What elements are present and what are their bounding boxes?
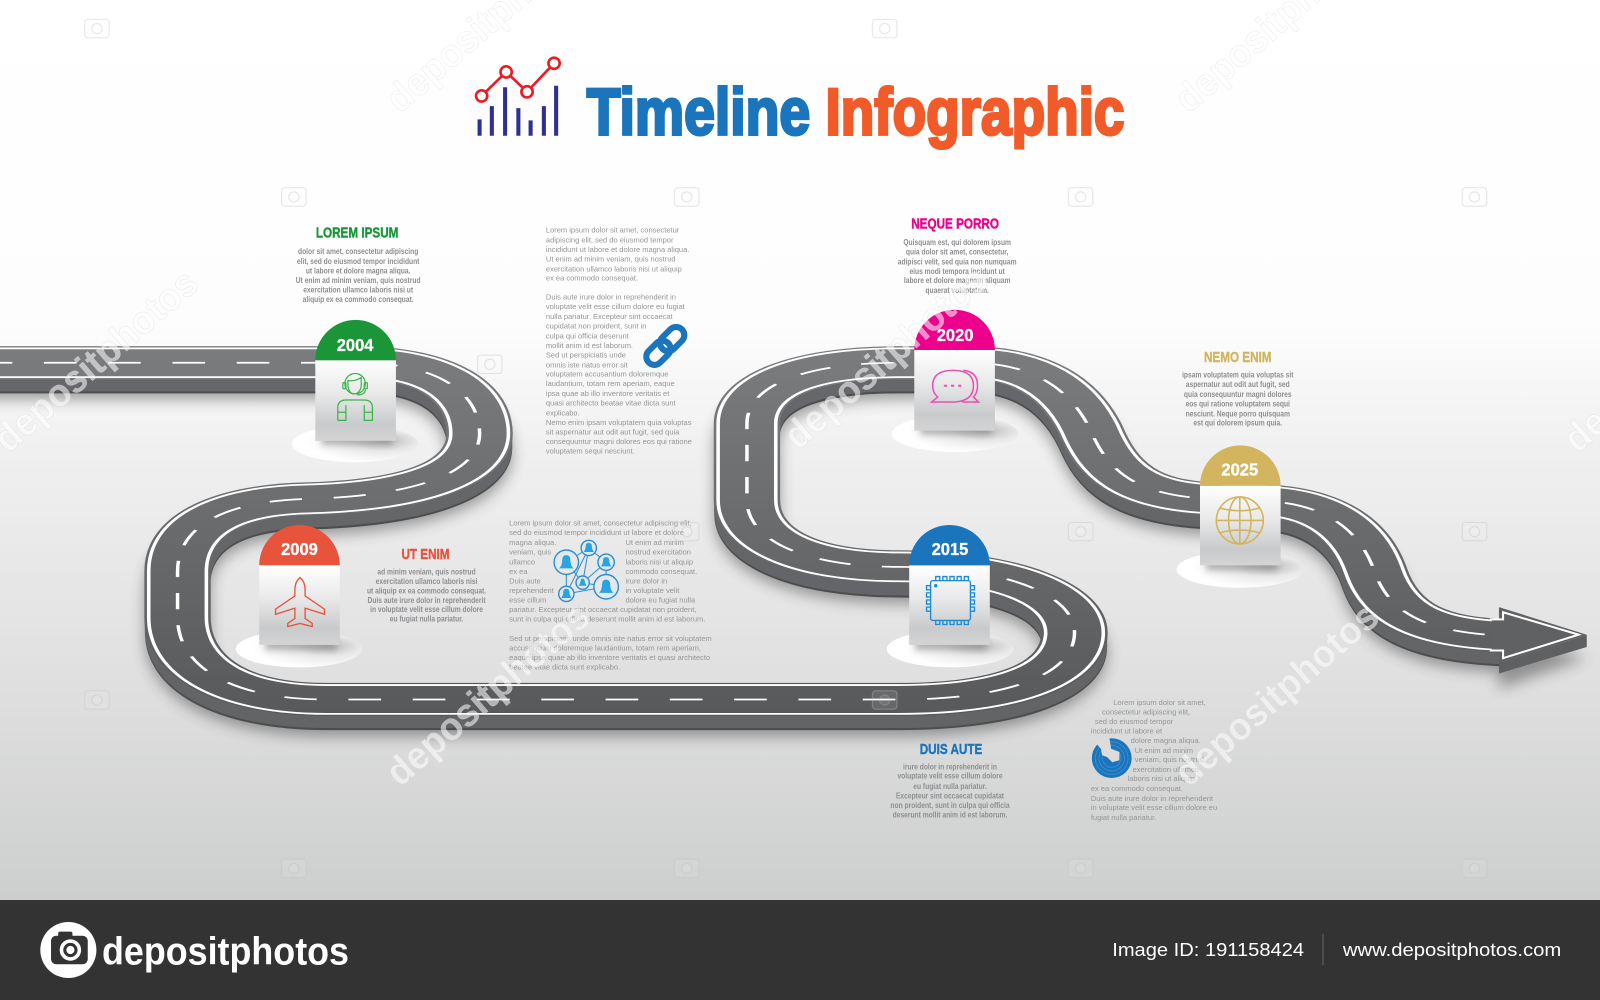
paragraph block with link icon: omnis iste natus error sit [546,360,629,369]
paragraph block with radial icon: consectetur adipiscing elit, [1102,707,1190,716]
footer url: www.depositphotos.com [1342,939,1561,960]
paragraph block with link icon: exercitation ullamco laboris nisi ut aliquip [546,264,682,273]
paragraph block with radial icon: Lorem ipsum dolor sit amet, [1113,698,1206,707]
paragraph block with link icon: Duis aute irure dolor in reprehenderit in [546,292,676,301]
text block: Ut Enim: in voluptate velit esse cillum dolore [370,605,483,614]
paragraph block with network icon: ex ea [509,567,528,576]
text block: Duis Aute: eu fugiat nulla pariatur. [913,781,987,791]
milestone 2025: 2025 [1221,460,1258,480]
text block: Lorem Ipsum: Ut enim ad minim veniam, quis nostrud [296,275,421,285]
road shadow [0,383,1587,720]
text block: Duis Aute: voluptate velit esse cillum dolore [897,771,1003,781]
footer logo [40,922,349,978]
text block: Neque Porro: quia dolor sit amet, consectetur, [906,247,1008,257]
arrow head [1490,607,1587,663]
text block: Ut Enim [367,546,486,624]
road side wall [0,365,1587,714]
paragraph block with network icon: commodo consequat. [626,567,697,576]
paragraph block with radial icon: veniam, quis nostrud [1135,755,1204,764]
paragraph block with link icon: consequuntur magni dolores eos qui ratione [546,437,692,446]
paragraph block with link icon: voluptate velit esse cillum dolore eu fugiat [546,302,686,311]
text block: Duis Aute: irure dolor in reprehenderit in [903,762,997,772]
paragraph block with link icon: voluptatem sequi nesciunt. [546,447,635,456]
text block: Neque Porro: eius modi tempora incidunt ut [909,266,1005,276]
icon: microchip [927,577,974,624]
paragraph block with link icon: nulla pariatur. Excepteur sint occaecat [546,312,674,321]
text block: Nemo Enim: ipsam voluptatem quia voluptas sit [1182,370,1294,380]
paragraph block with link icon: voluptatem accusantium doloremque [546,370,668,379]
text block: Lorem Ipsum: dolor sit amet, consectetur adipiscing [298,246,419,256]
paragraph block with network icon: Duis aute [509,577,541,586]
text block: Neque Porro: labore et dolore magnam aliquam [904,275,1011,285]
paragraph block with link icon: laudantium, totam rem aperiam, eaque [546,379,675,388]
paragraph block with radial icon: Duis aute irure dolor in reprehenderit [1091,794,1214,803]
footer logo: depositphotos [102,930,349,973]
paragraph block with link icon: adipiscing elit, sed do eiusmod tempor [546,235,674,244]
paragraph block with network icon: veniam, quis [509,548,552,557]
text block: Nemo Enim: nesciunt. Neque porro quisquam [1186,409,1290,419]
milestone 2009: 2009 [281,539,318,559]
milestone 2004 [292,320,418,462]
text block: Nemo Enim: NEMO ENIM [1204,349,1272,366]
footer bar [0,900,1600,1000]
text block: Nemo Enim: est qui dolorem ipsum quia. [1193,418,1282,428]
text block: Ut Enim: UT ENIM [401,546,450,562]
text block: Duis Aute: deserunt mollit anim id est laborum. [893,810,1007,820]
milestone 2015 [887,525,1013,667]
paragraph block with network icon: nostrud exercitation [626,548,691,557]
title: Timeline [587,76,810,150]
text block: Nemo Enim: eos qui ratione voluptatem sequi [1186,399,1290,409]
paragraph block with link icon: Ut enim ad minim veniam, quis nostrud [546,255,676,264]
paragraph block with network icon: sed do eiusmod tempor incididunt ut labore et dolore [509,528,684,537]
paragraph block with network icon: magna aliqua. [509,538,556,547]
title: Infographic [826,76,1124,150]
paragraph block with network icon: pariatur. Excepteur sint occaecat cupidatat non proident, [509,605,696,614]
watermark overlay: depositphotos [378,595,598,795]
watermark overlay: depositphotos [776,258,996,458]
paragraph block with radial icon: Ut enim ad minim [1135,746,1193,755]
paragraph block with link icon: Lorem ipsum dolor sit amet, consectetur [546,226,680,235]
text block: Nemo Enim [1182,349,1294,428]
paragraph block with radial icon: ex ea commodo consequat. [1091,784,1183,793]
paragraph block with radial icon [1091,698,1217,822]
text block: Lorem Ipsum: LOREM IPSUM [316,225,398,241]
paragraph block with network icon: in voluptate velit [626,586,680,595]
text block: Duis Aute: Excepteur sint occaecat cupidatat [896,791,1004,801]
paragraph block with link icon: sit aspernatur aut odit aut fugit, sed quia [546,428,680,437]
paragraph block with network icon: sunt in culpa qui officia deserunt mollit anim id est laborum. [509,614,705,623]
text block: Ut Enim: Duis aute irure dolor in reprehenderit [367,595,486,605]
milestone 2015: 2015 [932,539,969,559]
paragraph block with link icon: Nemo enim ipsam voluptatem quia voluptas [546,418,692,427]
paragraph block with link icon: culpa qui officia deserunt [546,331,630,340]
paragraph block with radial icon: fugiat nulla pariatur. [1091,813,1156,822]
paragraph block with radial icon: sed do eiusmod tempor [1095,717,1174,726]
icon: radial disc [1092,737,1132,778]
text block: Neque Porro: quaerat voluptatem. [925,285,989,295]
paragraph block with link icon: incididunt ut labore et dolore magna aliqua. [546,245,689,254]
paragraph block with link icon: ipsa quae ab illo inventore veritatis et [546,389,670,398]
milestone 2020: 2020 [937,325,973,345]
text block: Duis Aute: non proident, sunt in culpa qui officia [890,800,1010,810]
paragraph block with network icon: Ut enim ad minim [626,538,684,547]
text block: Lorem Ipsum: ut labore et dolore magna aliqua. [306,266,411,276]
watermark overlay: depositphotos [1166,595,1387,795]
paragraph block with network icon: beatae vitae dicta sunt explicabo. [509,662,620,671]
paragraph block with network icon: ullamco [509,557,535,566]
paragraph block with radial icon: incididunt ut labore et [1091,727,1163,736]
text block: Ut Enim: ut aliquip ex ea commodo consequat. [367,586,486,596]
title [587,76,1124,150]
text block: Duis Aute: DUIS AUTE [920,741,983,757]
milestone 2020 [892,310,1018,452]
icon: chain link [643,324,688,368]
paragraph block with network icon: eaque ipsa quae ab illo inventore veritatis et quasi architecto [509,653,710,662]
text block: Neque Porro: Quisquam est, qui dolorem ipsum [903,237,1011,247]
icon: globe [1216,497,1263,544]
paragraph block with link icon: explicabo. [546,408,580,417]
icon: headset operator [338,373,372,420]
text block: Nemo Enim: quia consequuntur magni dolores [1184,389,1292,399]
paragraph block with radial icon: exercitation ullamco [1133,765,1199,774]
paragraph block with network icon: irure dolor in [626,577,667,586]
text block: Ut Enim: ad minim veniam, quis nostrud [377,567,476,577]
text block: Lorem Ipsum: exercitation ullamco laboris nisi ut [303,285,414,295]
text block: Neque Porro: NEQUE PORRO [911,215,999,232]
paragraph block with radial icon: dolore magna aliqua. [1131,736,1201,745]
text block: Neque Porro: adipisci velit, sed quia non numquam [898,257,1017,266]
text block: Duis Aute [890,741,1010,820]
paragraph block with network icon: Sed ut perspiciatis unde omnis iste natus error sit voluptatem [509,634,712,643]
text block: Neque Porro [898,215,1017,295]
paragraph block with link icon [546,226,692,456]
paragraph block with network icon: reprehenderit [509,586,555,595]
text block: Lorem Ipsum: aliquip ex ea commodo consequat. [303,294,414,304]
paragraph block with network icon: esse cillum [509,596,546,605]
icon: airplane [276,578,324,627]
text block: Nemo Enim: aspernatur aut odit aut fugit, sed [1186,380,1290,389]
paragraph block with network icon [509,519,712,671]
paragraph block with link icon: ex ea commodo consequat. [546,274,638,283]
paragraph block with network icon: accusantium doloremque laudantium, totam rem aperiam, [509,644,701,653]
milestone 2025 [1177,445,1303,588]
road: winding timeline path ending in an arrow [0,363,1587,720]
milestone 2004: 2004 [337,335,374,355]
text block: Ut Enim: eu fugiat nulla pariatur. [390,614,463,624]
text block: Ut Enim: exercitation ullamco laboris nisi [376,576,477,586]
footer image id: Image ID: 191158424 [1112,939,1304,960]
paragraph block with network icon: dolore eu fugiat nulla [626,596,696,605]
paragraph block with link icon: quasi architecto beatae vitae dicta sunt [546,399,676,408]
title: chart icon [476,58,560,136]
paragraph block with link icon: cupidatat non proident, sunt in [546,322,646,331]
paragraph block with network icon: laboris nisi ut aliquip [626,557,693,566]
paragraph block with radial icon: laboris nisi ut aliquip [1128,774,1195,783]
paragraph block with link icon: mollit anim id est laborum. [546,341,633,350]
icon: chat bubbles [932,370,979,402]
road surface [0,363,1505,699]
icon: people network [554,540,618,602]
milestone 2009 [236,525,362,667]
text block: Lorem Ipsum [296,225,421,304]
paragraph block with network icon: Lorem ipsum dolor sit amet, consectetur adipiscing elit, [509,519,692,528]
paragraph block with link icon: Sed ut perspiciatis unde [546,351,626,360]
paragraph block with radial icon: in voluptate velit esse cillum dolore eu [1091,803,1217,812]
text block: Lorem Ipsum: elit, sed do eiusmod tempor incididunt [297,256,420,266]
